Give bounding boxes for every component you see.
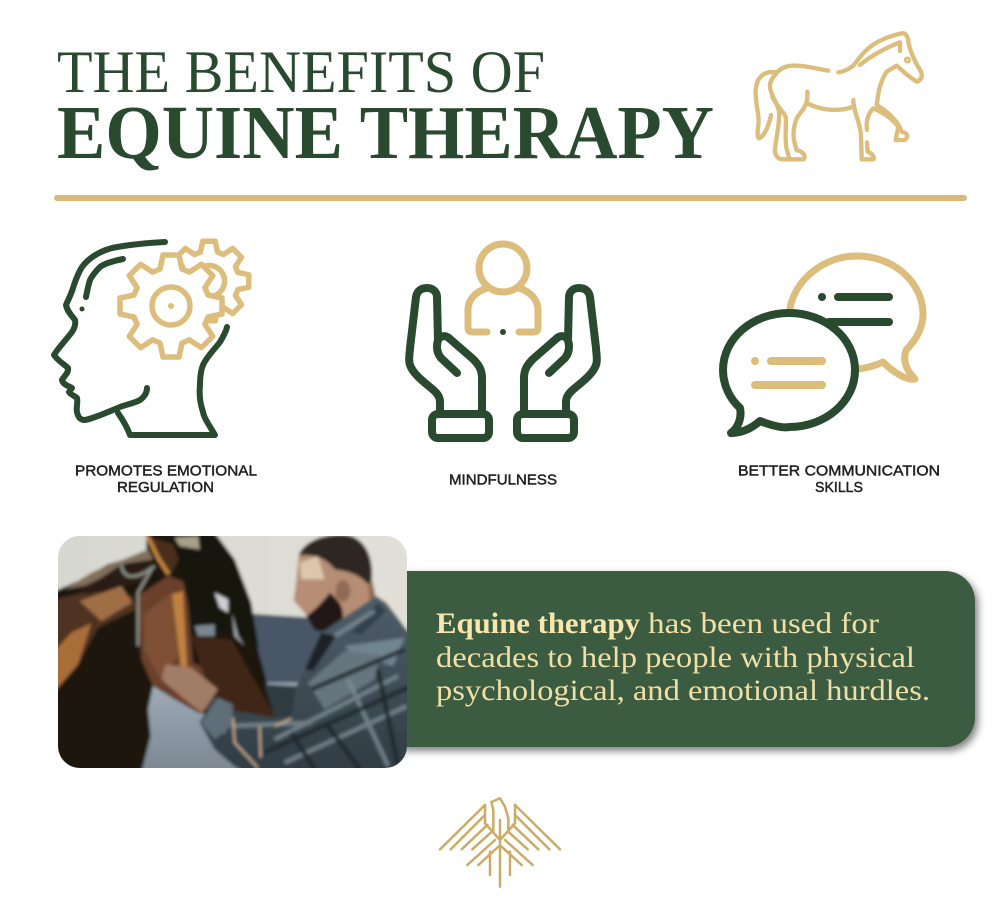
horse dark mass	[51, 533, 276, 773]
distant slate band	[245, 613, 411, 693]
gold lines	[751, 357, 826, 389]
label: mindfulness: MINDFULNESS	[449, 472, 557, 488]
neck brown	[55, 591, 136, 693]
man's neck and ear	[366, 578, 378, 602]
man's beard	[306, 593, 343, 631]
head outline	[54, 242, 227, 435]
title: THE BENEFITS OF	[57, 39, 545, 105]
label: promotes emotional regulation: PROMOTES EMOTIONAL	[75, 464, 257, 480]
gold bubble	[790, 256, 923, 379]
icon: horse	[756, 33, 922, 159]
shirt	[200, 596, 411, 773]
icon: head with gears	[54, 241, 249, 435]
panel text: decades to help people with physical	[436, 641, 915, 674]
icon: hands holding person	[409, 244, 597, 438]
dark bubble	[723, 313, 855, 433]
hand	[161, 664, 218, 713]
panel text: has been used for	[648, 607, 879, 640]
horse face	[138, 576, 221, 713]
label: better communication skills: SKILLS	[815, 480, 863, 496]
label: better communication skills	[738, 464, 940, 496]
person	[468, 244, 538, 332]
mane fringe	[65, 549, 153, 589]
label: promotes emotional regulation	[75, 464, 257, 496]
label: better communication skills: BETTER COMMUNICATION	[738, 464, 940, 480]
right hand	[517, 288, 597, 438]
small gear	[169, 241, 249, 321]
large gear	[120, 255, 222, 357]
panel text	[436, 607, 930, 707]
photo: man with horse	[51, 529, 415, 773]
panel text: psychological, and emotional hurdles.	[436, 674, 930, 707]
horse ear	[148, 536, 179, 577]
label: promotes emotional regulation: REGULATION	[117, 480, 214, 496]
dark lines	[818, 293, 893, 326]
markings	[215, 593, 228, 613]
cuff	[201, 698, 233, 739]
sky	[51, 529, 415, 629]
divider rule	[54, 195, 967, 201]
panel text: Equine therapy	[436, 607, 640, 640]
left hand	[409, 288, 489, 438]
forelock mane	[175, 533, 259, 648]
panel: green text box	[400, 571, 975, 747]
man's hair	[299, 534, 372, 584]
plaid lines	[231, 611, 407, 766]
man's face	[292, 552, 371, 619]
person dot	[500, 329, 506, 335]
title	[57, 39, 714, 175]
title: EQUINE THERAPY	[57, 91, 714, 175]
logo: gold phoenix	[440, 798, 560, 887]
halter	[121, 564, 155, 646]
lower background	[135, 683, 301, 773]
icon: speech bubbles	[723, 256, 923, 433]
